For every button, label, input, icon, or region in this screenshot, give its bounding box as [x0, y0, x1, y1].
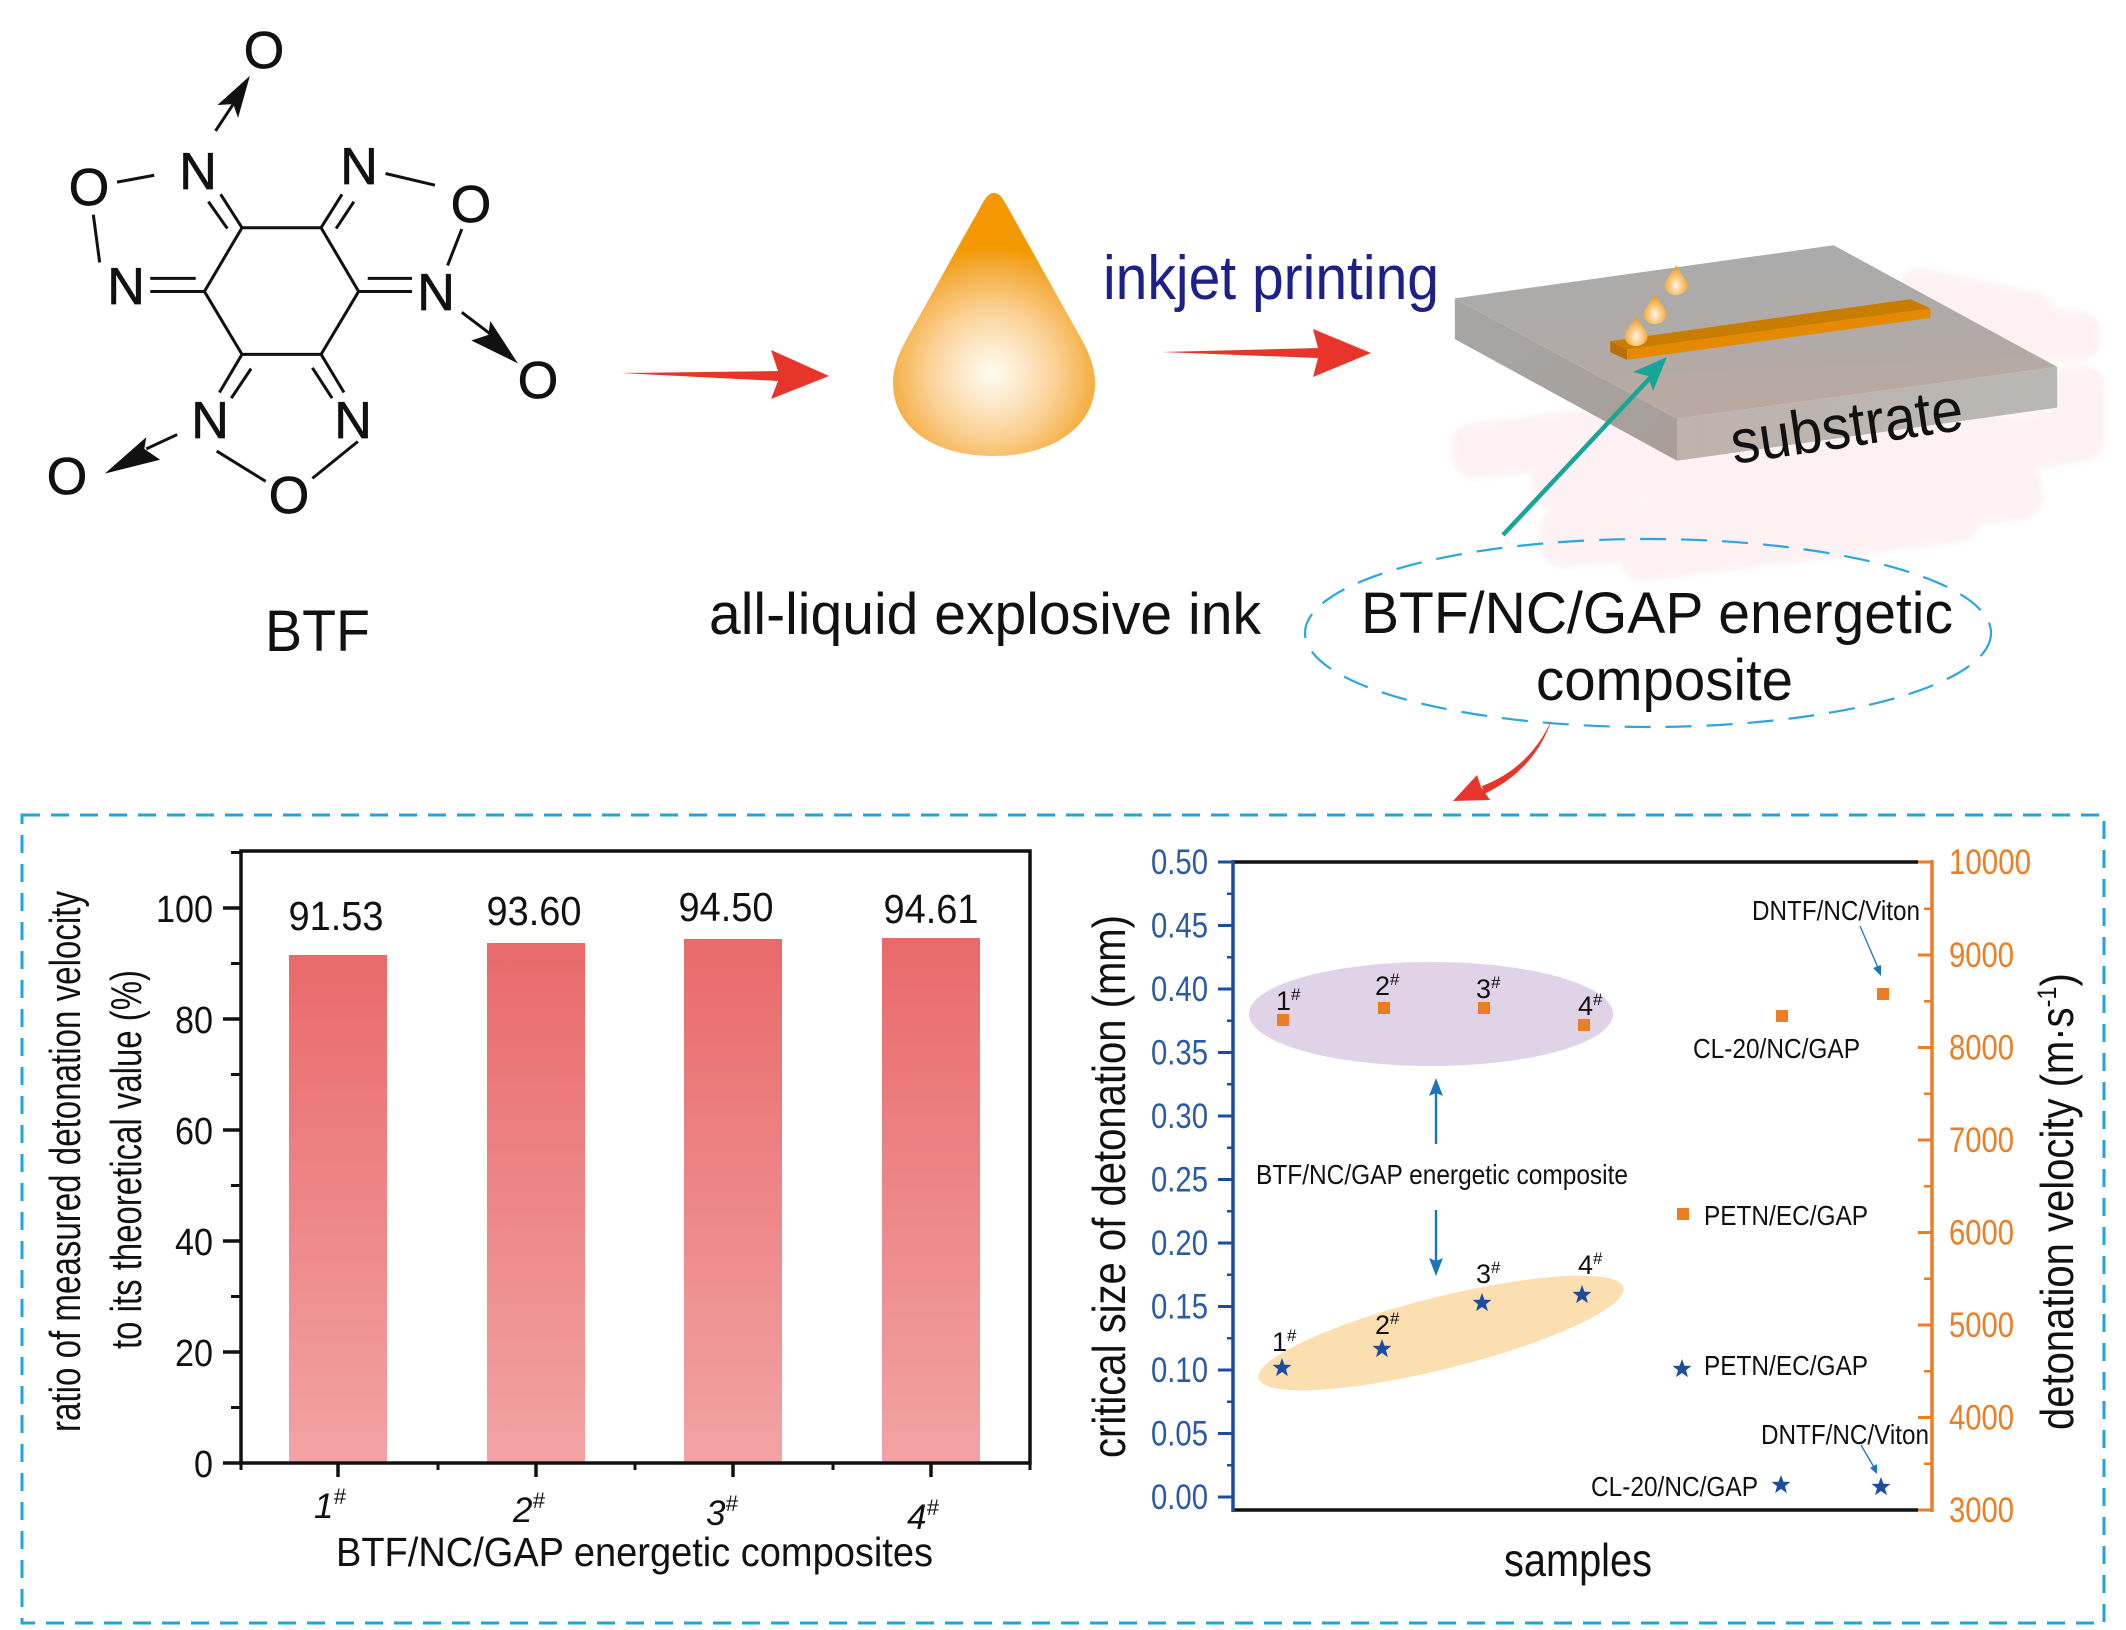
arrow: ink to substrate — [1162, 329, 1371, 377]
right axis tick labels: 4000 — [1949, 1398, 2014, 1438]
sample number labels: # — [1491, 1258, 1501, 1277]
right axis tick labels — [1949, 843, 2031, 1530]
right axis title: ) — [2032, 973, 2084, 987]
molecule: BTF structure: N — [417, 264, 455, 322]
y tick labels: 80 — [175, 1000, 213, 1042]
material labels: DNTF/NC/Viton — [1752, 895, 1920, 926]
sample number labels: 2 — [1375, 1310, 1390, 1340]
x tick labels: # — [725, 1491, 738, 1516]
panel: performance charts — [22, 815, 2104, 1623]
y tick labels: 40 — [175, 1222, 213, 1264]
arrow: DNTF velocity pointer — [1860, 926, 1881, 976]
left axis tick labels: 0.45 — [1151, 906, 1208, 946]
x tick labels: # — [926, 1495, 939, 1520]
material labels: BTF/NC/GAP energetic composite — [1256, 1159, 1628, 1190]
icon: falling droplets — [1624, 265, 1688, 346]
left axis title: critical size of detonation (mm) — [1083, 915, 1135, 1458]
label: substrate: substrate — [1726, 375, 1967, 478]
bar values — [288, 884, 978, 939]
left axis tick labels: 0.30 — [1151, 1097, 1208, 1136]
sample number labels: # — [1287, 1326, 1297, 1345]
sample number labels: 3 — [1476, 974, 1491, 1004]
arrow: label to critical size group — [1429, 1210, 1443, 1276]
arrow: DNTF critical size pointer — [1861, 1445, 1877, 1474]
arrow: BTF to ink — [621, 350, 829, 399]
left axis tick labels: 0.35 — [1151, 1034, 1208, 1072]
arrow: composite to performance panel — [1453, 719, 1552, 801]
sample number labels: # — [1390, 1309, 1400, 1328]
sample number labels: # — [1390, 970, 1400, 989]
molecule: BTF structure: O — [451, 176, 491, 234]
substrate top face — [1455, 245, 2057, 419]
printed strip — [1610, 299, 1930, 360]
arrow: composite to printed line — [1503, 357, 1667, 535]
right axis title: -1 — [2033, 987, 2062, 1007]
bar values: 94.50 — [678, 884, 774, 930]
bar chart: ratio of detonation velocity — [41, 851, 1030, 1575]
material labels — [1256, 895, 1929, 1502]
right axis tick labels: 6000 — [1949, 1214, 2014, 1252]
label: all-liquid explosive ink: all-liquid explosive ink — [709, 582, 1262, 647]
material labels: CL-20/NC/GAP — [1693, 1033, 1860, 1064]
arrow: label to velocity group — [1429, 1078, 1443, 1144]
frame — [1218, 860, 1932, 1512]
x tick labels: 2 — [513, 1491, 532, 1530]
right axis tick labels: 9000 — [1949, 936, 2014, 975]
x tick labels: 3 — [706, 1494, 725, 1533]
right axis tick labels: 7000 — [1949, 1121, 2014, 1160]
material labels: PETN/EC/GAP — [1704, 1200, 1868, 1231]
x tick labels: # — [333, 1484, 346, 1509]
x axis title: samples — [1504, 1534, 1652, 1586]
sample number labels: # — [1593, 990, 1603, 1009]
substrate left face — [1455, 298, 1677, 461]
sample number labels: # — [1291, 985, 1301, 1004]
bars — [289, 938, 980, 1463]
molecule: BTF structure — [47, 22, 558, 525]
material labels: PETN/EC/GAP — [1704, 1350, 1868, 1381]
x tick labels: 4 — [907, 1498, 926, 1537]
label: BTF: BTF — [265, 599, 370, 664]
orange square markers — [1277, 988, 1889, 1220]
molecule: BTF structure: O — [244, 22, 284, 80]
left axis tick labels: 0.10 — [1151, 1351, 1208, 1390]
left axis tick labels: 0.05 — [1151, 1414, 1208, 1454]
y tick labels: 0 — [194, 1444, 213, 1486]
callout: composite ellipse — [1305, 539, 1991, 727]
label: BTF/NC/GAP energetic composite: BTF/NC/GAP energetic — [1361, 581, 1953, 646]
molecule: BTF structure: O — [47, 448, 87, 506]
y tick labels — [156, 889, 213, 1486]
left axis tick labels: 0.00 — [1151, 1478, 1208, 1517]
right axis tick labels: 5000 — [1949, 1306, 2014, 1345]
y tick labels: 60 — [175, 1111, 213, 1153]
bar values: 94.61 — [884, 886, 978, 932]
molecule: BTF structure: N — [334, 392, 372, 450]
x tick labels: # — [532, 1488, 545, 1513]
y axis title: to its theoretical value (%) — [102, 970, 151, 1349]
substrate pink haze — [1449, 264, 2107, 584]
sample number labels: # — [1593, 1249, 1603, 1268]
molecule: BTF structure: O — [269, 467, 309, 525]
molecule: BTF structure: N — [107, 258, 145, 316]
sample number labels: 3 — [1476, 1259, 1491, 1289]
substrate front face — [1677, 367, 2057, 461]
label: inkjet printing: inkjet printing — [1103, 244, 1439, 313]
left axis tick labels — [1151, 843, 1208, 1517]
axes — [223, 851, 1030, 1477]
label: BTF/NC/GAP energetic composite — [1361, 581, 1953, 713]
molecule: BTF structure: O — [69, 159, 109, 217]
blue star markers — [1272, 1285, 1890, 1495]
sample number labels: 4 — [1578, 991, 1593, 1021]
label: BTF/NC/GAP energetic composite: composite — [1536, 648, 1793, 713]
sample number labels: 1 — [1272, 1327, 1287, 1357]
y tick labels: 100 — [156, 889, 213, 931]
icon: ink droplet — [893, 193, 1095, 456]
y axis title: ratio of measured detonation velocity — [41, 891, 90, 1432]
left axis tick labels: 0.40 — [1151, 970, 1208, 1009]
x tick labels: 1 — [314, 1487, 333, 1526]
sample number labels: 2 — [1375, 971, 1390, 1001]
sample number labels: 4 — [1578, 1250, 1593, 1280]
sample number labels: # — [1491, 973, 1501, 992]
right axis tick labels: 8000 — [1949, 1028, 2014, 1068]
highlight ellipse: velocity group — [1249, 962, 1613, 1066]
substrate block with printed line — [1455, 245, 2057, 461]
molecule: BTF structure: N — [191, 392, 229, 450]
left axis tick labels: 0.50 — [1151, 843, 1208, 882]
left axis tick labels: 0.20 — [1151, 1224, 1208, 1263]
bar values: 91.53 — [288, 893, 384, 939]
left axis tick labels: 0.15 — [1151, 1288, 1208, 1326]
bar values: 93.60 — [486, 888, 582, 934]
sample number labels: 1 — [1276, 986, 1291, 1016]
molecule: BTF structure: N — [179, 143, 217, 201]
material labels: CL-20/NC/GAP — [1591, 1471, 1758, 1502]
x tick labels — [314, 1484, 939, 1537]
molecule: BTF structure: O — [518, 352, 558, 410]
scatter chart: critical size and detonation velocity — [1083, 843, 2084, 1586]
molecule: BTF structure: N — [340, 138, 378, 196]
right axis tick labels: 10000 — [1949, 843, 2031, 882]
right axis title: detonation velocity (m·s — [2032, 1007, 2084, 1430]
y axis title — [41, 891, 151, 1432]
y tick labels: 20 — [175, 1333, 213, 1375]
right axis tick labels: 3000 — [1949, 1491, 2014, 1530]
left axis tick labels: 0.25 — [1151, 1160, 1208, 1200]
material labels: DNTF/NC/Viton — [1761, 1419, 1929, 1450]
highlight ellipse: critical size group — [1250, 1253, 1632, 1413]
x axis title: BTF/NC/GAP energetic composites — [336, 1529, 933, 1575]
sample number labels — [1272, 970, 1603, 1357]
